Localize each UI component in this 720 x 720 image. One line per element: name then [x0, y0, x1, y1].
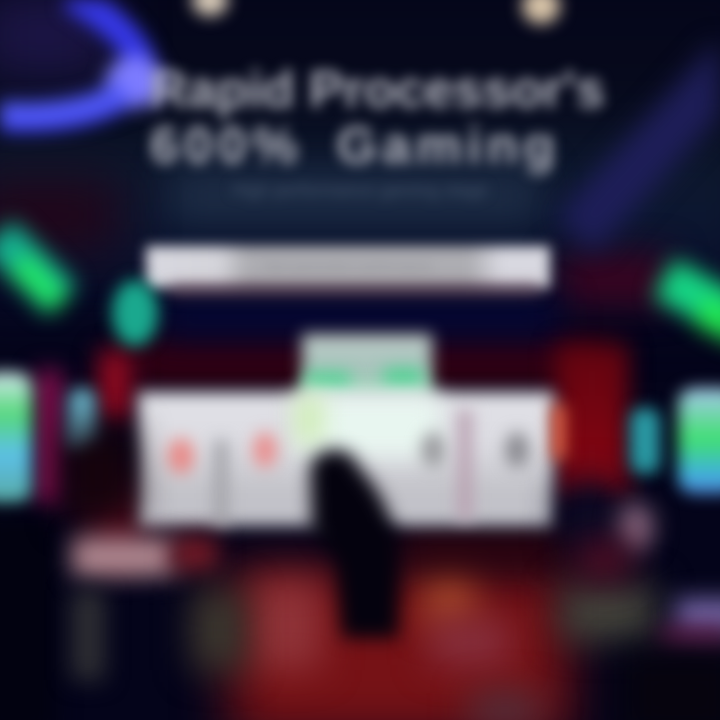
panel: blue band behind the stage [160, 302, 560, 334]
divider: card gap left [214, 440, 228, 525]
icon: right blue diagonal beam [554, 40, 720, 256]
silhouette: right figure [562, 480, 616, 550]
icon: red glow right of wall [552, 405, 566, 460]
icon: fourth grey card symbol [505, 432, 529, 468]
floor: dark maroon strip [400, 535, 570, 565]
callout: white banner [146, 246, 550, 288]
icon: right pinkish head [618, 502, 654, 552]
icon: green patch upper display right [384, 368, 422, 390]
panel: left small screen [68, 388, 96, 450]
panel: left magenta strip [36, 370, 62, 505]
panel: left grey column [72, 590, 104, 680]
silhouette: standing figure [295, 435, 412, 651]
icon: right ceiling light [522, 0, 560, 24]
panel: central upper display [302, 334, 432, 404]
panel: olive-grey seat right [560, 585, 656, 640]
silhouette: left seated figure [64, 430, 134, 520]
panel: lower muted carpet patch [470, 692, 540, 720]
panel: left lower red glow [92, 490, 142, 560]
icon: teal light [112, 280, 158, 346]
icon: green patch upper display left [306, 372, 350, 394]
title: Rapid Processor's [150, 61, 605, 119]
panel: centre bright section of wall [300, 395, 440, 457]
divider: card gap right [458, 410, 472, 520]
icon: right green light [642, 246, 720, 356]
panel: right red seat shade [580, 540, 630, 580]
panel: right red pillar [556, 345, 628, 495]
panel: left dark red wall [0, 180, 120, 250]
panel: left edge screen [0, 372, 32, 504]
title [142, 61, 610, 183]
silhouette: right foreground dark area [620, 650, 720, 720]
subtitle: High performance gaming stage [232, 180, 488, 200]
panel: right purple screen [676, 598, 720, 636]
icon: left ceiling light [192, 0, 228, 16]
panel: ceiling background [0, 0, 720, 320]
card: first playing card symbol [168, 438, 194, 474]
callout: white banner: Next generation performance [264, 259, 432, 274]
icon: blue neon arc [0, 0, 176, 147]
callout: banner pink underside [170, 286, 540, 294]
panel: white display wall [138, 392, 554, 526]
floor: red carpet [230, 570, 570, 720]
panel: right magenta glow [660, 628, 720, 646]
panel: right large screen [678, 388, 720, 494]
title: 600% Gaming [150, 117, 560, 175]
icon: yellow-green glow [295, 395, 323, 443]
panel: right red wall band [560, 255, 670, 305]
floor: bright carpet centre [252, 580, 322, 670]
panel: left pink desk [72, 538, 176, 576]
panel: upper left dark purple area [0, 0, 110, 80]
floor: rose highlight [430, 620, 510, 665]
panel: upper red band [130, 345, 610, 381]
panel: olive-grey seat left [192, 590, 246, 670]
icon: second red card symbol [253, 432, 277, 468]
panel: left red pillar [98, 350, 132, 420]
icon: third grey card symbol [421, 432, 445, 468]
panel: right small screen [630, 408, 660, 474]
floor: orange highlight [424, 575, 474, 625]
icon: left green light, diagonal [0, 210, 88, 327]
silhouette: left foreground column [0, 515, 56, 720]
panel: left desk red shade [172, 536, 218, 572]
panel: lit ceiling band [170, 170, 540, 222]
